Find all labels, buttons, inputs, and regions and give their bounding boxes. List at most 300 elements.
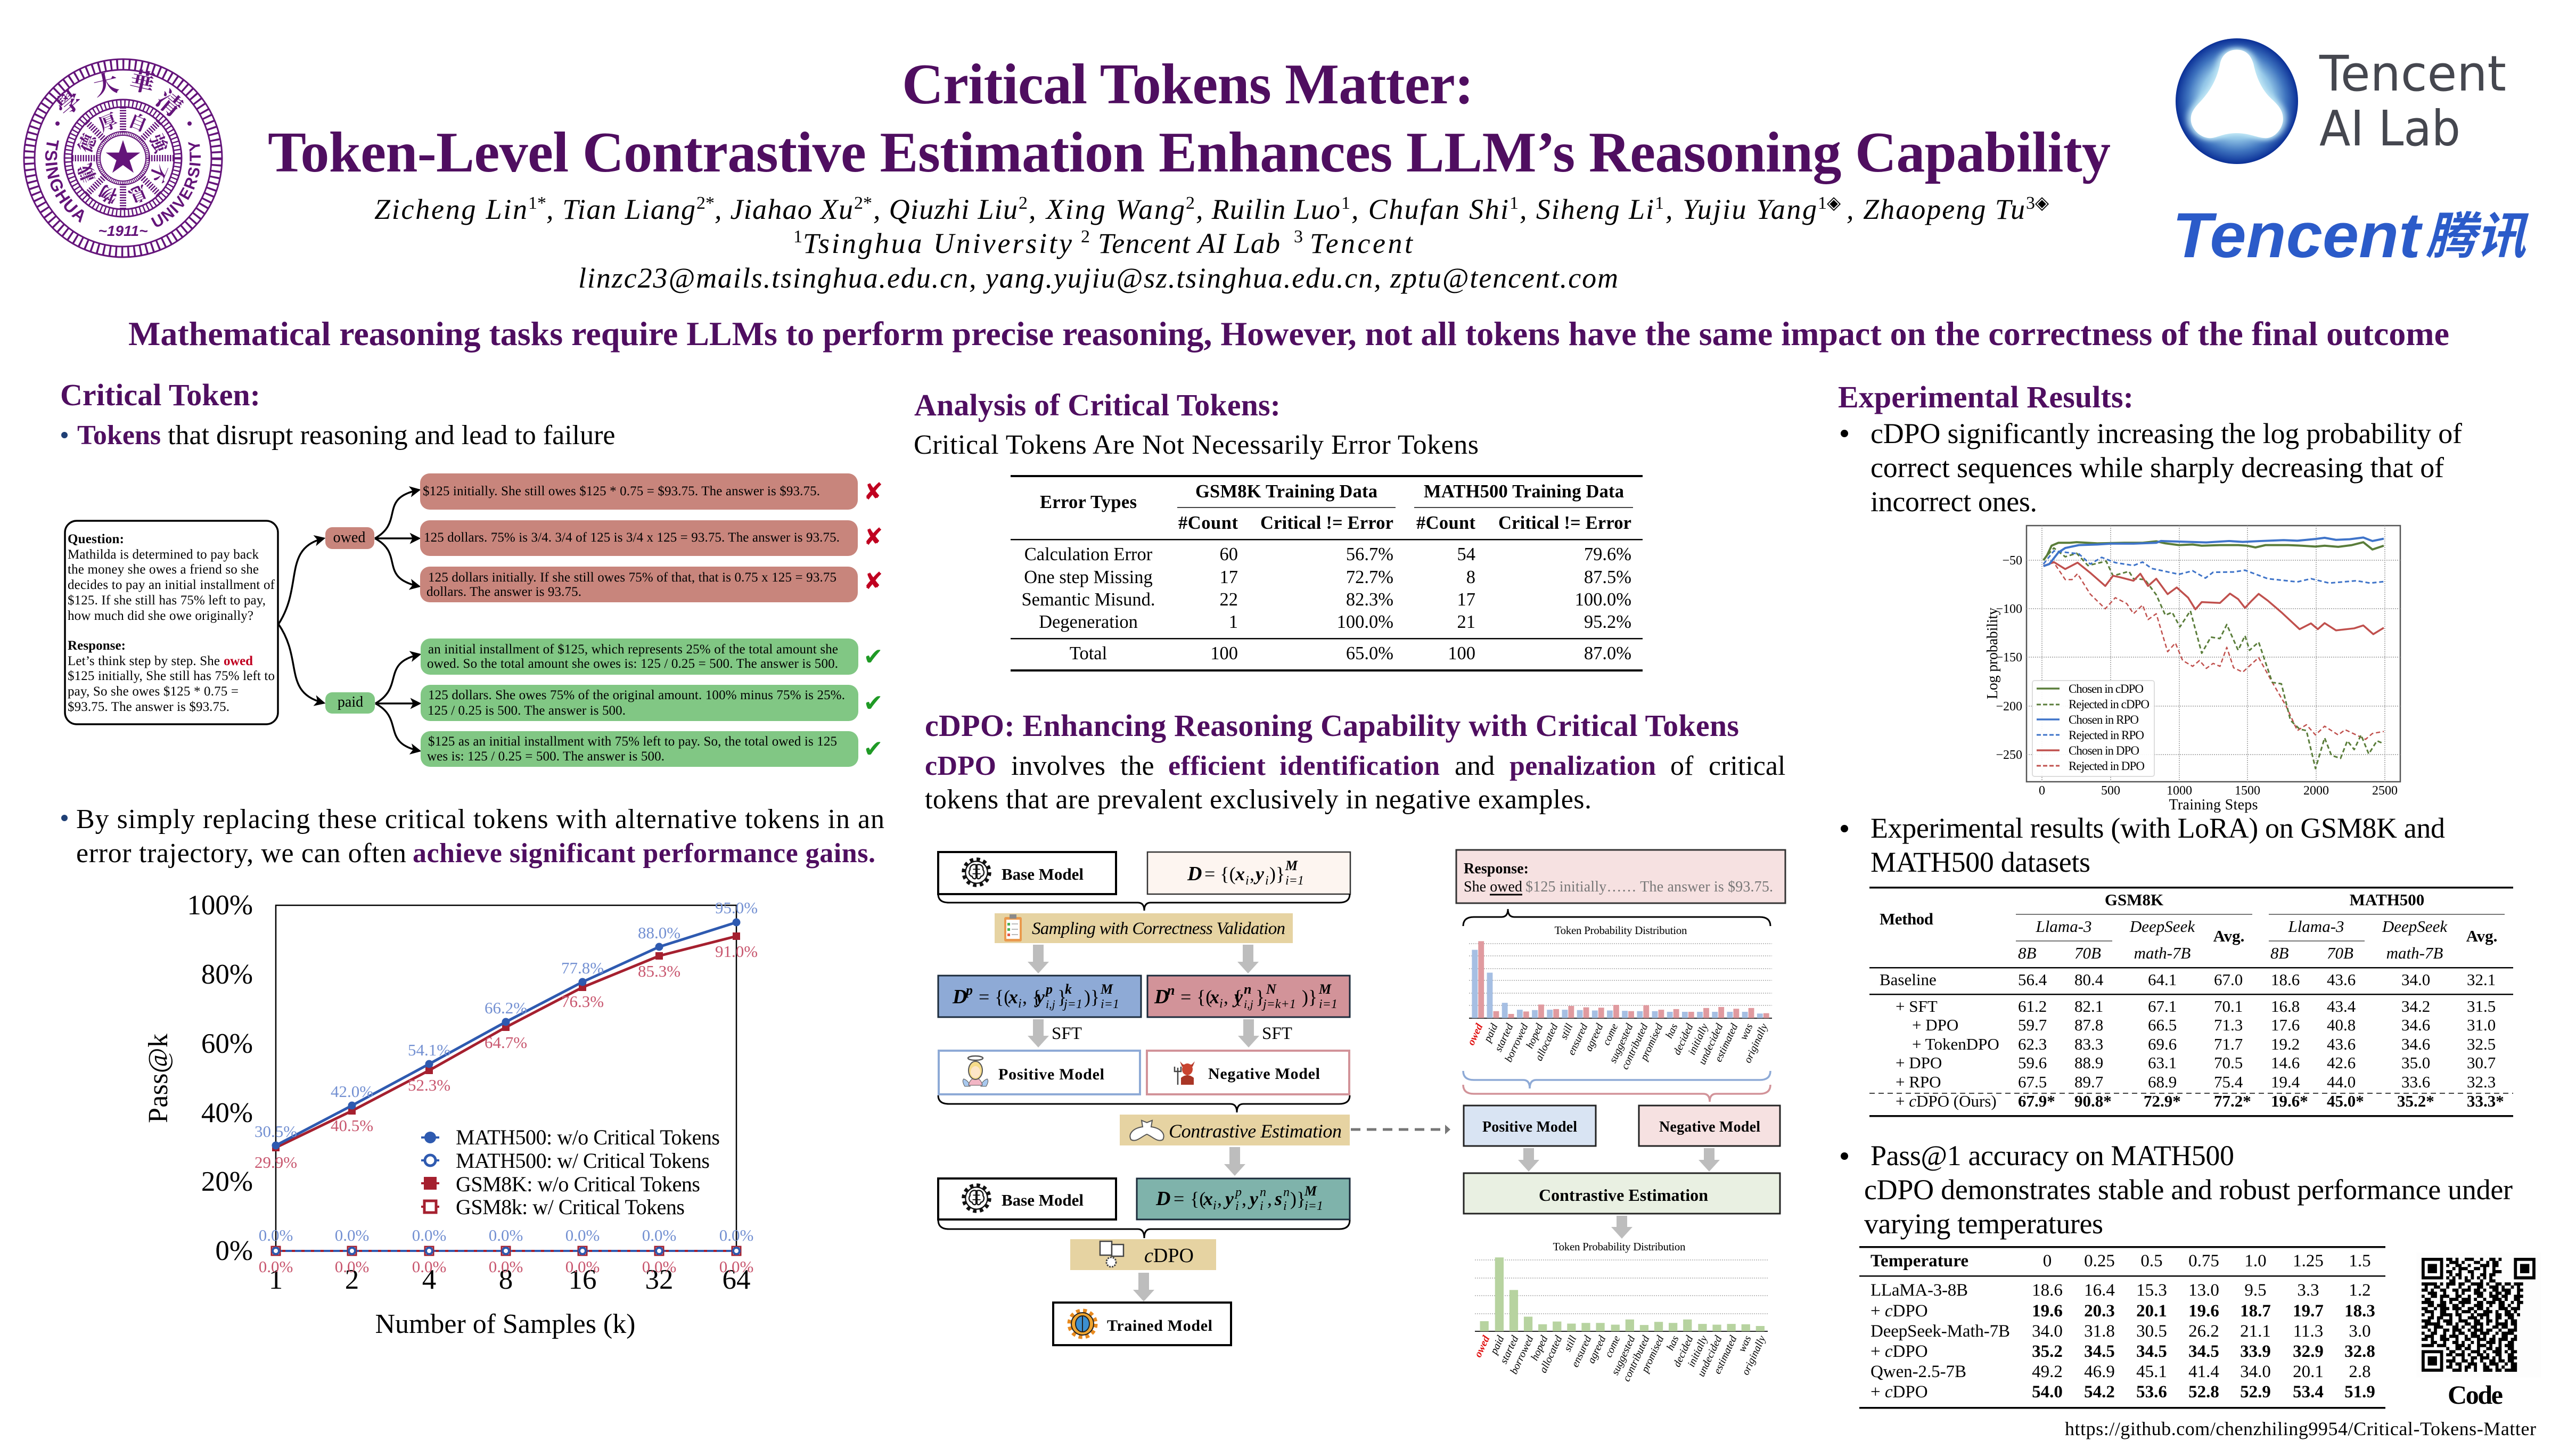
table: results on GSM8K and MATH500: 90.8* [2074,1092,2112,1110]
icons: cross and check marks: ✘ [864,568,883,595]
triplet dataset box: , [1242,1188,1246,1209]
brace [938,1220,1350,1238]
data labels: MATH500: 0.0% [489,1226,523,1245]
arrow: dashed link to detail [1351,1128,1445,1131]
data labels: GSM8K: 29.9% [255,1153,297,1172]
table: results on GSM8K and MATH500: 43.6 [2327,970,2356,989]
data labels: MATH500: 42.0% [331,1082,373,1101]
description: efficient [1168,751,1266,781]
table: results on GSM8K and MATH500: 33.3* [2467,1092,2504,1110]
continuation: owed 1: $125 initially. She still owes $125 * 0.75 = $93.75. The answer is $93.75. [423,484,820,498]
chart: token probability after: Token Probability Distribution [1553,1240,1686,1253]
table: error types: 79.6% [1584,544,1631,564]
negative model box [1147,1051,1349,1094]
positive model box: Positive Model [998,1066,1104,1083]
authors and affiliations: , Ruilin Luo [1196,193,1340,225]
continuation: paid 3: $125 as an initial installment with 75% left to pay. So, the total owed is 125 [428,734,837,749]
triplet dataset box [1137,1178,1350,1219]
legend [421,1125,720,1219]
table: temperature robustness: 3.0 [2349,1322,2371,1341]
question box: $125 initially, She still has 75% left to [68,669,275,683]
authors and affiliations: 1 [1509,193,1519,213]
description: identification [1279,751,1440,781]
authors and affiliations: , Jiahao Xu [715,193,853,225]
contrastive estimation box: Contrastive Estimation [1539,1185,1708,1205]
authors and affiliations: , Qiuzhi Liu [873,193,1018,225]
table: error types: 100 [1210,643,1238,664]
table: temperature robustness: 53.6 [2136,1382,2167,1402]
repository URL: https://github.com/chenzhiling9954/Critical-Tokens-Matter [2065,1418,2536,1439]
table: results on GSM8K and MATH500: 17.6 [2271,1016,2300,1034]
table: error types: Total [1070,643,1107,664]
token labels: still [1558,1021,1576,1041]
logo: Tsinghua University seal: UNIVERSITY [151,142,201,227]
table: results on GSM8K and MATH500: 19.4 [2271,1073,2300,1091]
table: results on GSM8K and MATH500: + SFT [1896,997,1938,1016]
table: results on GSM8K and MATH500: + TokenDPO [1912,1035,1999,1053]
arrow: to result distribution [1611,1216,1632,1239]
base model box 2: Base Model [1002,1191,1084,1209]
table: temperature robustness: 0.5 [2140,1251,2163,1271]
legend: Chosen in cDPO [2069,682,2144,695]
positive data box [938,976,1141,1017]
dataset box [1147,852,1350,894]
table: error types: Calculation Error [1024,544,1153,564]
icons: cross and check marks: ✔ [864,690,883,717]
authors and affiliations: 2* [854,193,872,213]
base model box [938,852,1116,894]
positive data box: p [1045,981,1053,997]
triplet dataset box: = [1174,1188,1184,1209]
negative model box: Negative Model [1208,1065,1320,1083]
table: temperature robustness: 20.3 [2084,1301,2115,1321]
table: temperature robustness: 34.0 [2032,1322,2063,1341]
data labels: GSM8K: 0.0% [412,1257,446,1276]
dataset box: M [1285,858,1298,873]
banner: cDPO: cDPO [1144,1245,1194,1267]
arrow: down [1224,1147,1245,1176]
description: and [1455,751,1495,781]
table: temperature robustness: 16.4 [2084,1281,2115,1300]
logo: Tsinghua University seal: 物 [94,179,121,210]
legend [2032,681,2154,776]
bullet: datasets: MATH500 datasets [1871,846,2090,878]
logo: Tsinghua University seal: 自 [125,106,152,137]
token labels: promised [1639,1333,1667,1376]
token labels: paid [1488,1333,1507,1357]
question box: Let’s think step by step. She [68,654,220,668]
dataset box: i [1265,874,1269,888]
bullet: log probability [1841,417,2462,518]
negative data box [1147,976,1350,1017]
token labels: decided [1671,1333,1696,1369]
token labels: borrowed [1503,1021,1531,1064]
continuation: owed 3: dollars. The answer is 93.75. [426,585,581,599]
y axis labels: 20% [201,1166,253,1197]
arrows: branches [278,490,420,751]
token labels: hoped [1524,1021,1546,1050]
data labels: GSM8K [255,942,758,1276]
negative data box: j=k+1 [1261,997,1296,1011]
authors and affiliations: Zicheng Lin [374,193,527,225]
negative data box: )} [1302,986,1317,1008]
table: results on GSM8K and MATH500: Llama-3 [2035,917,2092,936]
panel: analysis of critical tokens [914,388,1643,672]
logo: Tsinghua University seal: 大 [89,63,121,103]
data labels: GSM8K: 0.0% [489,1257,523,1276]
positive data box: i,j [1046,997,1055,1011]
bullet: replacing critical tokens: error trajectory, we can often [76,838,406,869]
table: results on GSM8K and MATH500: MATH500 [2350,890,2424,909]
triplet dataset box: M [1304,1183,1317,1199]
data labels: GSM8K: 85.3% [638,962,680,980]
table: temperature robustness: Qwen-2.5-7B [1871,1362,1966,1381]
token labels: contributed [1621,1333,1652,1383]
positive data box: )} [1084,986,1100,1008]
logo: Tsinghua University seal: 德 [71,128,102,156]
table: results on GSM8K and MATH500: 64.1 [2148,970,2177,989]
negative data box: , { [1224,986,1242,1008]
table: temperature robustness: 54.2 [2084,1382,2115,1402]
table: temperature robustness: 34.0 [2240,1362,2271,1381]
tree diagram: critical token branching [65,473,883,767]
series: GSM8K without critical tokens [272,932,740,1151]
line: rejected in RPO [2044,551,2384,583]
icons: cross and check marks [864,478,883,763]
token labels: allocated [1533,1021,1561,1063]
table: results on GSM8K and MATH500: 33.6 [2401,1073,2430,1091]
table: results on GSM8K and MATH500: 70.5 [2214,1053,2243,1072]
token labels: initially [1686,1022,1711,1057]
data labels: GSM8K: 76.3% [561,992,604,1011]
table: temperature robustness: 1.2 [2349,1281,2371,1300]
table: temperature robustness: 18.3 [2344,1301,2375,1321]
table: error types: 72.7% [1346,567,1393,587]
table: error types: 1 [1229,612,1238,632]
banner: contrastive estimation: Contrastive Estimation [1169,1120,1342,1142]
table: results on GSM8K and MATH500: 63.1 [2148,1053,2177,1072]
triplet dataset box: y [1223,1188,1234,1209]
data labels: MATH500: 30.5% [255,1122,297,1141]
table: results on GSM8K and MATH500: 69.6 [2148,1035,2177,1053]
token labels: has [1664,1334,1681,1352]
table: results on GSM8K and MATH500: 34.6 [2401,1035,2430,1053]
positive model box [1464,1106,1596,1146]
chart: Pass@k line chart: Pass@k [143,1034,174,1123]
arrow: to trained model [1133,1273,1154,1301]
data labels: GSM8K: 0.0% [719,1257,753,1276]
table: results on GSM8K and MATH500: 82.1 [2074,997,2103,1016]
token labels: started [1492,1021,1516,1053]
authors and affiliations: 3 [1294,227,1303,247]
token labels: owed [1465,1021,1486,1047]
continuation: paid 1: an initial installment of $125, which represents 25% of the total amount she [428,642,838,657]
table: temperature robustness: 52.9 [2240,1382,2271,1402]
table: temperature robustness: 32.8 [2344,1342,2375,1361]
bullet: temperatures: varying temperatures [1864,1208,2103,1240]
table: temperature robustness: 32.9 [2293,1342,2324,1361]
table: temperature robustness: 1.0 [2244,1251,2267,1271]
table: results on GSM8K and MATH500: 89.7 [2074,1073,2103,1091]
banner: sampling: Sampling with Correctness Validation [1032,919,1285,938]
table: temperature robustness: 3.3 [2297,1281,2319,1300]
table: results on GSM8K and MATH500: 59.6 [2018,1053,2047,1072]
logo: Tencent: 腾讯 [2426,196,2529,268]
description: critical [1709,751,1785,781]
description: penalization [1509,751,1656,781]
series: MATH500 without critical tokens [272,918,740,1149]
heading: cDPO: Enhancing Reasoning Capability with Critical Tokens [925,708,1739,743]
table: temperature robustness: DeepSeek-Math-7B [1871,1322,2010,1341]
table: error types [1011,475,1643,672]
table: error types: 22 [1219,590,1238,610]
table: temperature robustness: + cDPO [1871,1382,1928,1402]
continuation: owed 1 [420,473,858,510]
logo: Tencent AI Lab: AI Lab [2319,100,2460,157]
continuation: owed 2: 125 dollars. 75% is 3/4. 3/4 of 125 is 3/4 x 125 = 93.75. The answer is 93.75. [424,530,840,545]
table: error types: GSM8K Training Data [1195,481,1377,502]
table: results on GSM8K and MATH500: DeepSeek [2382,917,2448,936]
subtitle statement: Mathematical reasoning tasks require LLMs to perform precise reasoning, However, not all tokens have the same impact on the correctness of the final outcome [128,315,2449,353]
data labels: MATH500: 0.0% [412,1226,446,1245]
title: Critical Tokens Matter: [902,53,1474,116]
token labels: suggested [1607,1021,1636,1065]
table: temperature robustness: 46.9 [2084,1362,2115,1381]
question box: decides to pay an initial installment of [68,578,275,592]
table: temperature robustness: 54.0 [2032,1382,2063,1402]
table: temperature robustness: 15.3 [2136,1281,2167,1300]
negative data box: n [1244,981,1251,997]
table: error types: 8 [1466,567,1475,587]
table: temperature robustness: 11.3 [2293,1322,2323,1341]
table: temperature robustness: 9.5 [2244,1281,2267,1300]
QR code [2416,1252,2541,1378]
question box: $125. If she still has 75% left to pay, [68,593,266,608]
table: temperature robustness: 31.8 [2084,1322,2115,1341]
negative model box: Negative Model [1659,1119,1760,1135]
legend: Chosen in RPO [2069,713,2139,726]
panel: cDPO [925,708,1785,1383]
triplet dataset box: p [1234,1185,1242,1199]
logo: Tsinghua University seal: 息 [124,179,152,211]
logo: Tsinghua University seal: 學 [46,80,88,123]
table: temperature robustness: 34.5 [2136,1342,2167,1361]
positive data box: {( [995,986,1010,1008]
bullet: replacing critical tokens: achieve significant performance gains. [413,838,875,869]
authors and affiliations: 2* [696,193,715,213]
authors and affiliations: linzc23@mails.tsinghua.edu.cn, yang.yujiu@sz.tsinghua.edu.cn, zptu@tencent.com [578,262,1618,294]
table: error types: #Count [1178,513,1238,533]
continuation: paid 2 [421,685,858,721]
continuation: paid 3: wes is: 125 / 0.25 = 500. The answer is 500. [427,749,664,764]
table: results on GSM8K and MATH500: Llama-3 [2287,917,2344,936]
logo: Tencent [2172,196,2529,271]
panel: experimental results [1838,380,2541,1439]
triplet dataset box: i [1235,1199,1239,1213]
table: results on GSM8K and MATH500: 18.6 [2271,970,2300,989]
table: results on GSM8K and MATH500: 61.2 [2018,997,2047,1016]
table: temperature robustness: 1.25 [2293,1251,2324,1271]
triplet dataset box: {( [1190,1188,1205,1209]
banner: contrastive estimation [1120,1115,1350,1145]
bullet: temperatures [1841,1140,2513,1240]
bullet: datasets: Experimental results (with LoRA) on GSM8K and [1871,812,2445,844]
arrows: to positive and negative data [1028,945,1259,973]
table: results on GSM8K and MATH500: math-7B [2386,944,2443,962]
table: results on GSM8K and MATH500: Baseline [1880,970,1937,989]
table: temperature robustness: + cDPO [1871,1342,1928,1361]
table: results on GSM8K and MATH500: 71.7 [2214,1035,2243,1053]
icon: angel [963,1056,988,1086]
table: results on GSM8K and MATH500: 35.0 [2401,1053,2430,1072]
brace [1463,909,1770,926]
y axis labels: 60% [201,1028,253,1059]
positive data box: , { [1022,986,1041,1008]
triplet dataset box: y [1248,1188,1259,1209]
table: temperature robustness: + cDPO [1871,1301,1928,1321]
bullet: temperatures: Pass@1 accuracy on MATH500 [1871,1140,2234,1172]
table: results on GSM8K and MATH500: 19.6* [2271,1092,2308,1110]
heading: Experimental Results: [1838,380,2134,414]
data labels: MATH500: 0.0% [565,1226,600,1245]
positive model box [939,1051,1140,1094]
token labels: come [1601,1022,1621,1047]
table: results on GSM8K and MATH500: Avg. [2466,927,2497,945]
banner: sampling [995,913,1293,943]
table: error types: 87.5% [1584,567,1631,587]
positive data box: p [965,983,973,998]
table: results on GSM8K and MATH500: 66.5 [2148,1016,2177,1034]
question box: how much did she owe originally? [68,609,253,623]
table: results on GSM8K and MATH500: 34.0 [2401,970,2430,989]
question box: the money she owes a friend so she [68,562,259,577]
table: results on GSM8K and MATH500: 75.4 [2214,1073,2243,1091]
negative data box: D [1154,986,1169,1008]
table: temperature robustness: 33.9 [2240,1342,2271,1361]
response box: Response: [1464,861,1529,877]
triplet dataset box: i [1213,1199,1217,1213]
table: error types: 100.0% [1575,590,1631,610]
question box: pay, So she owes $125 * 0.75 = [68,684,239,699]
legend: MATH500: w/ Critical Tokens [456,1149,710,1173]
token labels: started [1498,1333,1521,1365]
table: temperature robustness: 18.7 [2240,1301,2271,1321]
legend: GSM8K: w/o Critical Tokens [456,1172,700,1196]
table: results on GSM8K and MATH500: 70B [2327,944,2353,962]
table: results on GSM8K and MATH500: 67.9* [2018,1092,2055,1110]
negative data box: y [1232,986,1243,1008]
table: temperature robustness: 53.4 [2293,1382,2324,1402]
table: temperature robustness: 19.6 [2032,1301,2063,1321]
token labels: originally [1742,1022,1770,1065]
table: temperature robustness: 51.9 [2344,1382,2375,1402]
bullet: temperatures: cDPO demonstrates stable and robust performance under [1864,1174,2513,1206]
axis labels: 500 [2101,784,2120,798]
table: error types: 65.0% [1346,643,1393,664]
x axis labels: 4 [422,1264,436,1295]
table: results on GSM8K and MATH500: 87.8 [2074,1016,2103,1034]
table: results on GSM8K and MATH500: 77.2* [2214,1092,2251,1110]
table: results on GSM8K and MATH500: + cDPO (Ours) [1896,1092,1997,1110]
question box [65,521,278,724]
token: owed [325,527,374,549]
triplet dataset box: s [1274,1188,1282,1209]
table: temperature robustness: LLaMA-3-8B [1871,1281,1968,1300]
triplet dataset box: i=1 [1305,1199,1323,1213]
table: temperature robustness: 2.8 [2349,1362,2371,1381]
icons: cross and check marks: ✘ [864,523,883,551]
description: of [1670,751,1694,781]
base model box: Base Model [1002,865,1084,883]
triplet dataset box: n [1260,1185,1266,1199]
token labels: has [1663,1022,1680,1040]
axis labels: −100 [1996,602,2022,616]
flow diagram: training pipeline [938,852,1450,1345]
chart: log probability over training steps: Log probability [1984,608,2001,699]
continuation: paid 2: 125 dollars. She owes 75% of the original amount. 100% minus 75% is 25%. [428,688,845,702]
logo: Tsinghua University seal: 清 [150,81,191,124]
authors and affiliations: 2 [1081,227,1090,247]
token labels: ensured [1569,1333,1594,1369]
triplet dataset box: )} [1290,1188,1306,1209]
table: temperature robustness: 34.5 [2084,1342,2115,1361]
line: rejected in cDPO [2044,548,2384,768]
positive data box: i [1018,997,1022,1011]
trained model box: Trained Model [1107,1317,1212,1335]
data labels: GSM8K: 40.5% [331,1116,373,1135]
panel: critical token [60,378,884,1339]
authors and affiliations: 1◈ [1818,193,1841,213]
axis labels [1996,554,2398,798]
heading: Critical Token: [60,378,260,412]
QR caption: Code [2448,1380,2503,1410]
authors and affiliations: , Yujiu Yang [1666,193,1817,225]
bullet: tokens definition: Tokens that disrupt reasoning and lead to failure [77,420,615,451]
axis labels: 0 [2039,784,2045,798]
negative data box: {( [1196,986,1212,1008]
bullet: log probability: incorrect ones. [1871,486,2037,518]
icon: arm wrestling [1130,1120,1164,1141]
axis labels: 1500 [2235,784,2260,798]
token labels: promised [1638,1021,1666,1063]
token labels: originally [1740,1334,1768,1377]
negative model box [1639,1106,1780,1146]
authors and affiliations: 2 [1186,193,1195,213]
token labels: initially [1685,1334,1710,1369]
icons: cross and check marks: ✘ [864,478,883,505]
table: results on GSM8K and MATH500: 70.1 [2214,997,2243,1016]
table: error types: 21 [1457,612,1475,632]
logo: Tsinghua University seal [23,59,223,258]
data labels: MATH500: 0.0% [642,1226,676,1245]
table: results on GSM8K and MATH500: 83.3 [2074,1035,2103,1053]
continuation: owed 3 [420,567,858,602]
legend: Chosen in DPO [2069,744,2139,757]
data labels: GSM8K: 0.0% [642,1257,676,1276]
data labels: MATH500: 0.0% [335,1226,369,1245]
positive data box: } [1057,986,1067,1008]
negative data box: i=1 [1319,997,1338,1011]
triplet dataset box: i [1260,1199,1264,1213]
line: chosen in RPO [2044,537,2384,566]
table: error types: Critical != Error [1498,513,1631,533]
table: results on GSM8K and MATH500: 19.2 [2271,1035,2300,1053]
line: chosen in cDPO [2044,541,2384,560]
table: temperature robustness: Temperature [1871,1251,1968,1271]
table: results on GSM8K and MATH500: 67.1 [2148,997,2177,1016]
triplet dataset box: x [1203,1188,1213,1209]
x axis labels: 16 [569,1264,596,1295]
